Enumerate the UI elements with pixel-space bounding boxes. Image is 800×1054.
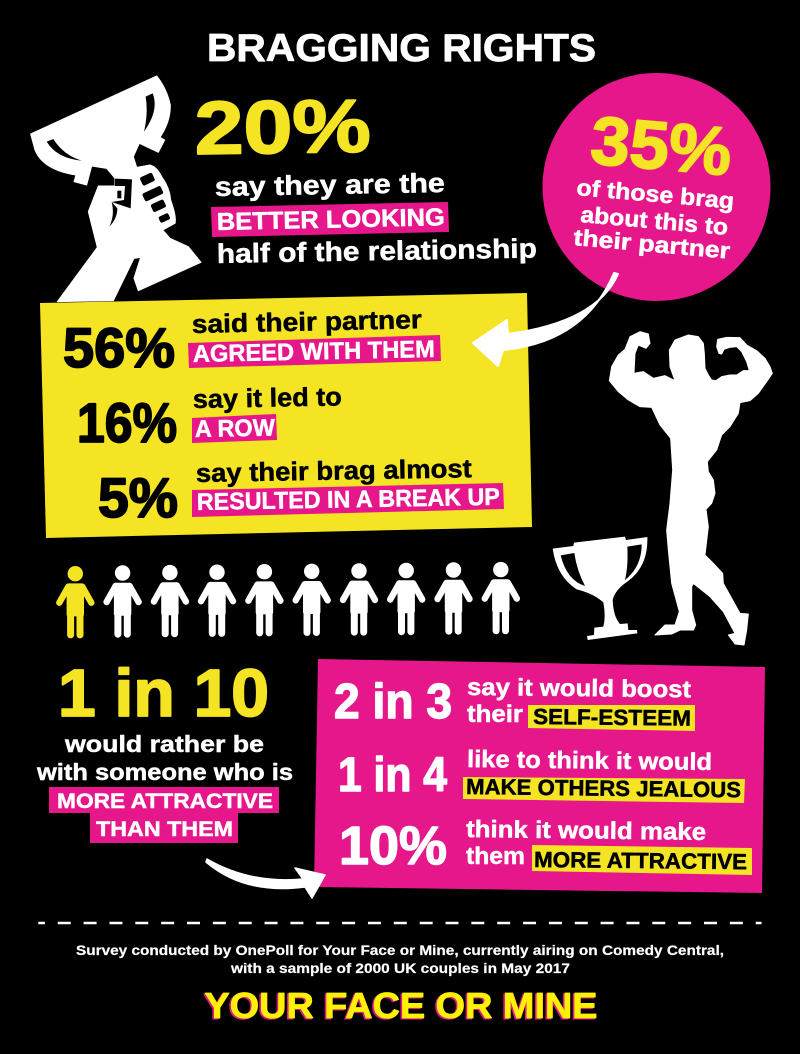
- callout: pink circle 35 percent: about this to: [580, 201, 729, 240]
- icon: small trophy: [553, 537, 647, 640]
- row: 1 in 4: 1 in 4: [338, 749, 447, 802]
- text: say they are the better looking half: [211, 168, 537, 269]
- row: 10 percent: them: [466, 843, 525, 870]
- row: 16 percent: [77, 381, 342, 454]
- highlight: more attractive than them: [49, 787, 279, 843]
- title: BRAGGING RIGHTS: [207, 27, 596, 70]
- stat: 1 in 10: 1 in 10: [58, 656, 269, 731]
- row: 2 in 3: SELF-ESTEEM: [533, 704, 691, 731]
- row: 1 in 4: [338, 746, 745, 803]
- pictogram: row of ten people, one highlighted: [59, 562, 517, 635]
- text: say they are the better looking half: half of the relationship: [217, 233, 537, 269]
- row: 1 in 4: MAKE OTHERS JEALOUS: [466, 774, 741, 802]
- row: 10 percent: 10%: [339, 816, 447, 876]
- highlight: more attractive than them: MORE ATTRACTIVE: [57, 789, 273, 813]
- highlight: better looking: BETTER LOOKING: [217, 204, 445, 236]
- panel: pink reasons: [314, 659, 765, 893]
- text: would rather be with someone more attractive: [36, 731, 293, 843]
- row: 5 percent: 5%: [98, 466, 178, 529]
- row: 5 percent: [98, 453, 504, 529]
- row: 2 in 3: [334, 674, 695, 731]
- stat: 20 percent: 20%: [194, 84, 371, 170]
- text: survey note: with a sample of 2000 UK couples in May 2017: [230, 961, 570, 976]
- text: survey note: Survey conducted by OnePoll for Your Face or Mine, currently airing on Comedy Central,: [76, 943, 724, 958]
- row: 16 percent: A ROW: [195, 415, 275, 443]
- icon: bodybuilder: [609, 332, 772, 645]
- row: 56 percent: [63, 304, 441, 379]
- icon: hand holding trophy: [31, 76, 201, 302]
- row: 2 in 3: their: [467, 701, 523, 728]
- arrow: circle to yellow panel: [473, 273, 618, 366]
- highlight: more attractive than them: THAN THEM: [96, 817, 233, 841]
- callout: pink circle 35 percent: 35%: [588, 102, 735, 190]
- callout: pink circle 35 percent: [542, 73, 770, 301]
- row: 10 percent: [339, 816, 752, 876]
- text: would rather be with someone more attractive: would rather be: [64, 731, 264, 757]
- row: 5 percent: RESULTED IN A BREAK UP: [197, 484, 500, 516]
- text: would rather be with someone more attractive: with someone who is: [36, 759, 293, 785]
- row: 10 percent: MORE ATTRACTIVE: [534, 847, 747, 874]
- row: 2 in 3: say it would boost: [467, 674, 691, 703]
- row: 16 percent: 16%: [77, 391, 177, 454]
- row: 2 in 3: 2 in 3: [334, 675, 452, 729]
- row: 56 percent: said their partner: [191, 304, 422, 339]
- text: survey note: [76, 943, 724, 976]
- row: 10 percent: think it would make: [466, 816, 706, 846]
- row: 5 percent: say their brag almost: [196, 453, 472, 488]
- callout: pink circle 35 percent: of those brag: [576, 174, 735, 214]
- logo: your face or mine: YOUR FACE OR MINE: [204, 985, 598, 1026]
- callout: pink circle 35 percent: their partner: [573, 224, 731, 264]
- arrow: to pink panel: [206, 859, 325, 898]
- logo: your face or mine: YOUR FACE OR MINE: [203, 986, 596, 1027]
- row: 56 percent: 56%: [63, 316, 175, 379]
- panel: yellow results: [40, 293, 532, 538]
- text: say they are the better looking half: say they are the: [215, 168, 445, 202]
- row: 1 in 4: like to think it would: [467, 746, 712, 776]
- row: 56 percent: AGREED WITH THEM: [193, 336, 435, 368]
- row: 16 percent: say it led to: [193, 381, 342, 414]
